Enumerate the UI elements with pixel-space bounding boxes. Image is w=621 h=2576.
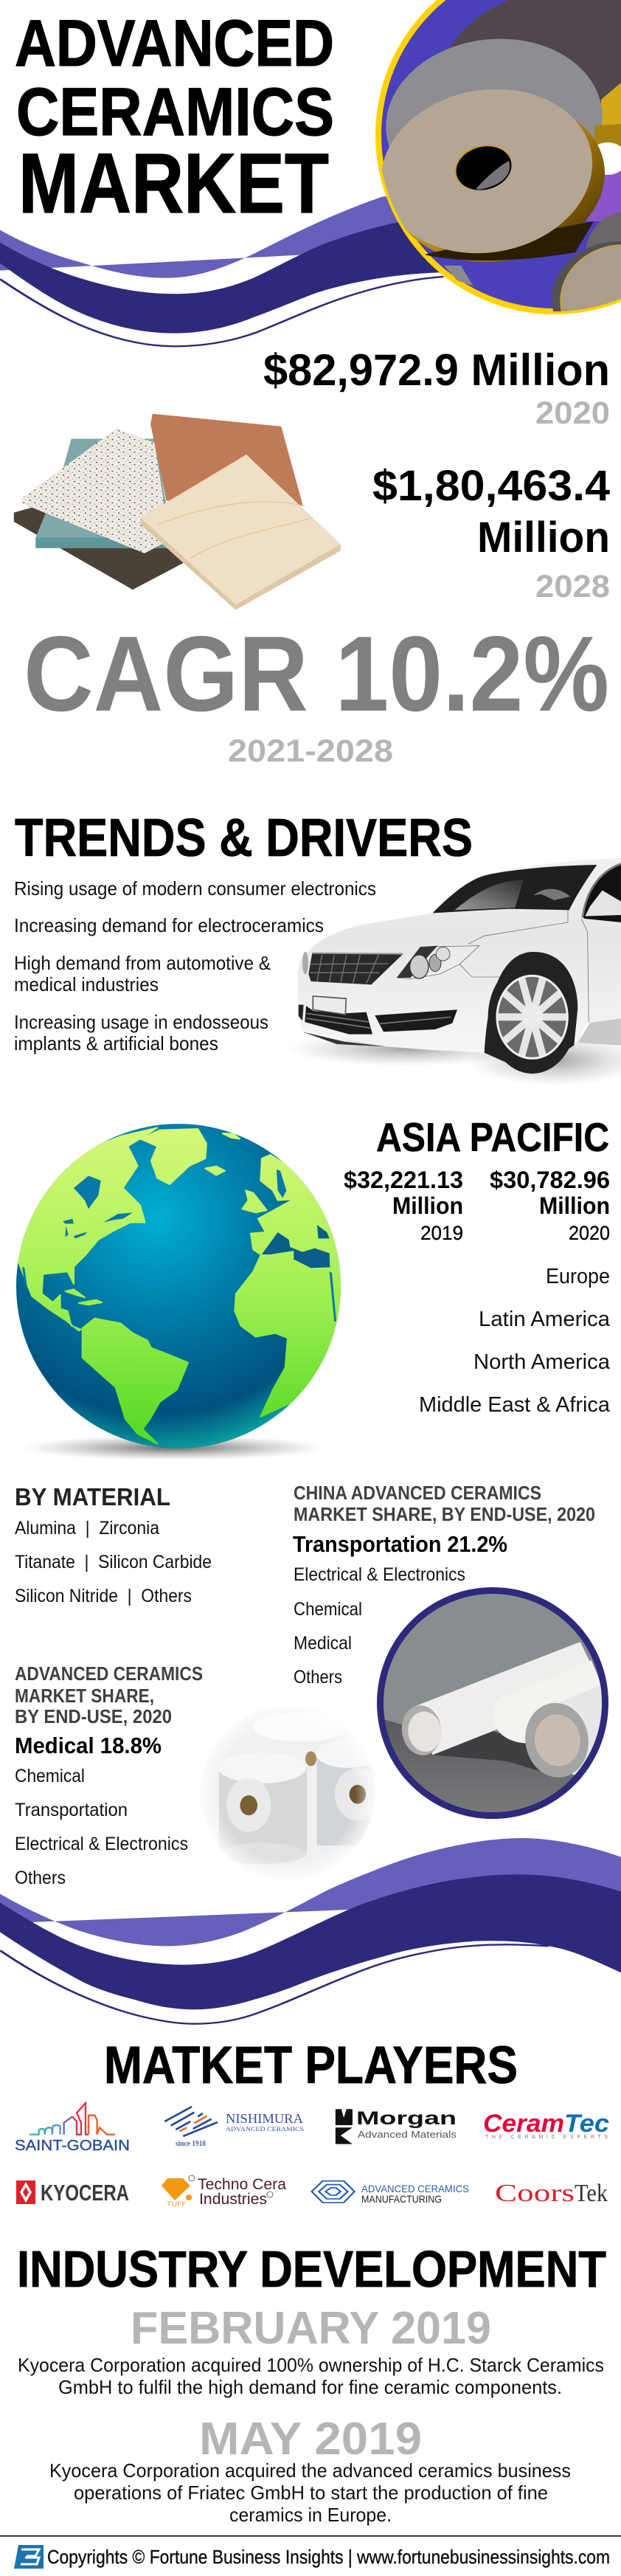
panel: china market share: Medical xyxy=(294,1633,352,1654)
development: May 2019: Kyocera Corporation acquired the advanced ceramics business xyxy=(49,2459,571,2482)
panel: regional market: Middle East & Africa xyxy=(419,1393,611,1417)
logo: Kyocera xyxy=(16,2180,129,2206)
photo: ceramic tubes xyxy=(376,1586,612,1825)
logo: Nishimura: since 1918 xyxy=(176,2140,206,2148)
panel: global market share xyxy=(15,1662,203,1888)
panel: regional market: Million xyxy=(392,1192,463,1219)
market size 2028: Million xyxy=(477,514,610,562)
panel: by material: Silicon Nitride | Others xyxy=(15,1586,192,1606)
logo: Advanced Ceramics Manufacturing: ADVANCED CERAMICS xyxy=(361,2183,469,2195)
logo: Kyocera: KYOCERA xyxy=(41,2180,129,2206)
panel: regional market: $32,221.13 xyxy=(344,1167,463,1193)
photo: ceramic cylinders xyxy=(208,1714,375,1873)
trends list: medical industries xyxy=(14,973,159,995)
logo: Morgan xyxy=(336,2108,457,2144)
panel: global market share: Others xyxy=(15,1868,66,1888)
panel: regional market: Million xyxy=(539,1192,610,1219)
title: CERAMICS xyxy=(16,75,334,150)
logo: Techno Cera Industries: Techno Cera xyxy=(198,2176,286,2193)
development: February 2019: GmbH to fulfil the high demand for fine ceramic components. xyxy=(58,2376,562,2398)
logo: Techno Cera Industries: Industries xyxy=(199,2191,267,2208)
market size 2020 xyxy=(263,345,610,431)
heading: trends and drivers: TRENDS & DRIVERS xyxy=(15,809,473,868)
CAGR: 2021-2028 xyxy=(228,733,393,769)
panel: regional market: 2020 xyxy=(569,1222,610,1244)
development: May 2019: MAY 2019 xyxy=(199,2414,422,2465)
development: May 2019: operations of Friatec GmbH to start the production of fine xyxy=(74,2482,548,2504)
trends list: Increasing usage in endosseous xyxy=(14,1011,268,1033)
panel: china market share: MARKET SHARE, BY END-USE, 2020 xyxy=(294,1503,595,1525)
panel: by material: BY MATERIAL xyxy=(15,1483,170,1510)
trends list: Rising usage of modern consumer electronics xyxy=(14,877,376,899)
logo: CoorsTek: Coors xyxy=(495,2180,575,2207)
market size 2028: 2028 xyxy=(535,569,610,604)
title: ADVANCED xyxy=(15,6,334,80)
logo: Techno Cera Industries xyxy=(162,2175,286,2209)
panel: global market share: Medical 18.8% xyxy=(15,1733,162,1758)
logo: Morgan: Advanced Materials xyxy=(358,2129,457,2140)
logo: Nishimura: NISHIMURA xyxy=(226,2111,303,2126)
logo: Advanced Ceramics Manufacturing: MANUFACTURING xyxy=(361,2193,442,2205)
panel: global market share: Chemical xyxy=(15,1766,85,1786)
panel: regional market: 2019 xyxy=(420,1222,463,1244)
panel: china market share: Others xyxy=(294,1667,342,1688)
logo: Saint-Gobain xyxy=(15,2103,130,2154)
panel: regional market: Latin America xyxy=(479,1308,611,1331)
panel: regional market: North America xyxy=(473,1350,611,1374)
logo: CoorsTek xyxy=(495,2180,608,2207)
logo: CeramTec xyxy=(483,2110,609,2140)
logo: Nishimura xyxy=(164,2107,304,2148)
panel: regional market: Europe xyxy=(546,1265,610,1288)
divider wave xyxy=(0,1838,621,2024)
market size 2020: 2020 xyxy=(535,396,610,431)
title xyxy=(15,6,334,231)
development: May 2019: ceramics in Europe. xyxy=(229,2504,392,2526)
icon: globe xyxy=(15,1124,344,1460)
market size 2020: $82,972.9 Million xyxy=(263,345,610,395)
panel: by material: Alumina | Zirconia xyxy=(15,1518,159,1539)
icon: white car xyxy=(288,858,621,1086)
panel: china market share: Electrical & Electronics xyxy=(294,1564,465,1585)
title: MARKET xyxy=(18,137,329,231)
panel: global market share: Transportation xyxy=(15,1800,128,1820)
panel: china market share xyxy=(293,1482,595,1688)
market size 2028 xyxy=(372,462,610,604)
panel: global market share: MARKET SHARE, xyxy=(15,1685,154,1707)
development: May 2019 xyxy=(49,2414,571,2526)
panel: global market share: ADVANCED CERAMICS xyxy=(15,1662,203,1685)
development: February 2019: FEBRUARY 2019 xyxy=(131,2303,491,2354)
panel: by material: Titanate | Silicon Carbide xyxy=(15,1552,212,1572)
logo: Saint-Gobain: SAINT-GOBAIN xyxy=(15,2137,130,2154)
logo: Advanced Ceramics Manufacturing xyxy=(312,2181,469,2205)
trends list xyxy=(14,877,376,1054)
heading: market players: MATKET PLAYERS xyxy=(104,2037,518,2095)
trends list: High demand from automotive & xyxy=(14,952,271,974)
panel: global market share: Electrical & Electronics xyxy=(15,1834,188,1854)
logo: CoorsTek: Tek xyxy=(575,2180,608,2207)
market size 2028: $1,80,463.4 xyxy=(372,462,610,510)
panel: china market share: Chemical xyxy=(294,1599,362,1620)
logo: Techno Cera Industries: TUFF xyxy=(167,2200,187,2209)
panel: regional market: $30,782.96 xyxy=(490,1167,610,1193)
logo: CeramTec: THE CERAMIC EXPERTS xyxy=(485,2135,608,2140)
logo: Nishimura: ADVANCED CERAMICS xyxy=(226,2125,304,2133)
logo: CeramTec: Ceram xyxy=(483,2110,564,2138)
panel: china market share: CHINA ADVANCED CERAMICS xyxy=(294,1482,541,1504)
logo: CeramTec: Tec xyxy=(564,2110,609,2138)
logo: Morgan: Morgan xyxy=(356,2108,457,2129)
development: February 2019: Kyocera Corporation acquired 100% ownership of H.C. Starck Ceramics xyxy=(18,2354,604,2376)
panel: regional market xyxy=(344,1114,611,1417)
development: February 2019 xyxy=(18,2303,604,2398)
icon: ceramic tiles xyxy=(14,414,341,610)
trends list: Increasing demand for electroceramics xyxy=(14,914,324,936)
hero image: ceramic discs xyxy=(375,0,621,314)
panel: global market share: BY END-USE, 2020 xyxy=(15,1705,172,1727)
header wave xyxy=(0,187,475,346)
panel: by material xyxy=(15,1483,212,1606)
panel: china market share: Transportation 21.2% xyxy=(293,1531,507,1557)
trends list: implants & artificial bones xyxy=(14,1032,218,1054)
